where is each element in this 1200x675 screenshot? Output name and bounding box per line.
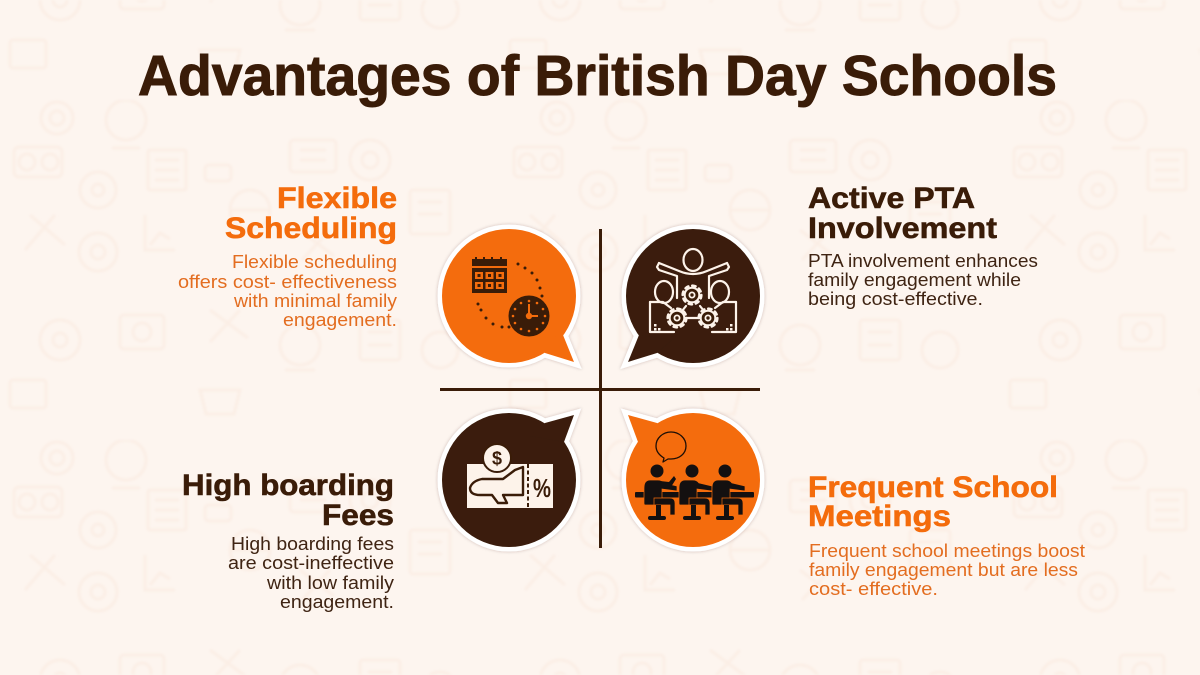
panel: flexible scheduling text: [178, 182, 398, 330]
text block: frequent school meetings: Frequent school meetings boost: [809, 540, 1085, 561]
text block: high boarding fees: are cost-ineffective: [228, 552, 394, 573]
heading: active PTA involvement: Active PTA: [808, 182, 975, 215]
text block: active PTA: PTA involvement enhances: [808, 250, 1038, 271]
panel: frequent school meetings text: [808, 471, 1085, 599]
heading: high boarding fees: Fees: [322, 499, 394, 532]
text block: flexible scheduling: offers cost- effectiveness: [178, 271, 397, 292]
speech bubble: frequent school meetings: [626, 413, 760, 547]
icon: plane ticket with dollar coin: %: [533, 473, 551, 503]
title: Advantages of British Day Schools: [138, 44, 1057, 108]
heading: flexible scheduling: [225, 182, 397, 245]
text block: active PTA: family engagement while: [808, 269, 1021, 290]
quadrant divider lines: [440, 229, 760, 548]
panel: high boarding fees text: [182, 469, 395, 612]
text block: high boarding fees: engagement.: [280, 591, 394, 612]
text block: frequent school meetings: cost- effective.: [809, 578, 938, 599]
text block: active PTA: being cost-effective.: [808, 288, 983, 309]
heading: high boarding fees: [182, 469, 394, 532]
icon: team with gears: [650, 249, 736, 332]
text block: flexible scheduling: engagement.: [283, 309, 397, 330]
icon: people at a meeting with speech balloon: [635, 432, 754, 520]
speech bubble: active PTA: [626, 229, 760, 363]
text block: active PTA: [808, 250, 1038, 309]
text block: flexible scheduling: with minimal family: [233, 290, 398, 311]
heading: flexible scheduling: Scheduling: [225, 212, 397, 245]
speech bubble: flexible scheduling: [442, 229, 576, 363]
text block: high boarding fees: High boarding fees: [231, 533, 394, 554]
text block: flexible scheduling: Flexible scheduling: [232, 251, 397, 272]
text block: high boarding fees: [228, 533, 395, 612]
heading: frequent school meetings: Meetings: [808, 500, 951, 533]
heading: flexible scheduling: Flexible: [277, 182, 397, 215]
text block: frequent school meetings: family engagement but are less: [809, 559, 1078, 580]
text block: high boarding fees: with low family: [266, 572, 395, 593]
icon: calendar and clock: [472, 257, 550, 336]
text block: frequent school meetings: [809, 540, 1085, 599]
panel: active PTA text: [808, 182, 1038, 309]
heading: active PTA involvement: Involvement: [808, 212, 997, 245]
speech bubble: high boarding fees: [442, 413, 576, 547]
heading: frequent school meetings: [808, 471, 1058, 533]
heading: active PTA involvement: [808, 182, 997, 245]
icon: plane ticket with dollar coin: [467, 444, 553, 508]
icon: plane ticket with dollar coin: $: [492, 448, 502, 468]
heading: high boarding fees: High boarding: [182, 469, 394, 502]
text block: flexible scheduling: [178, 251, 398, 330]
heading: frequent school meetings: Frequent School: [808, 471, 1058, 504]
